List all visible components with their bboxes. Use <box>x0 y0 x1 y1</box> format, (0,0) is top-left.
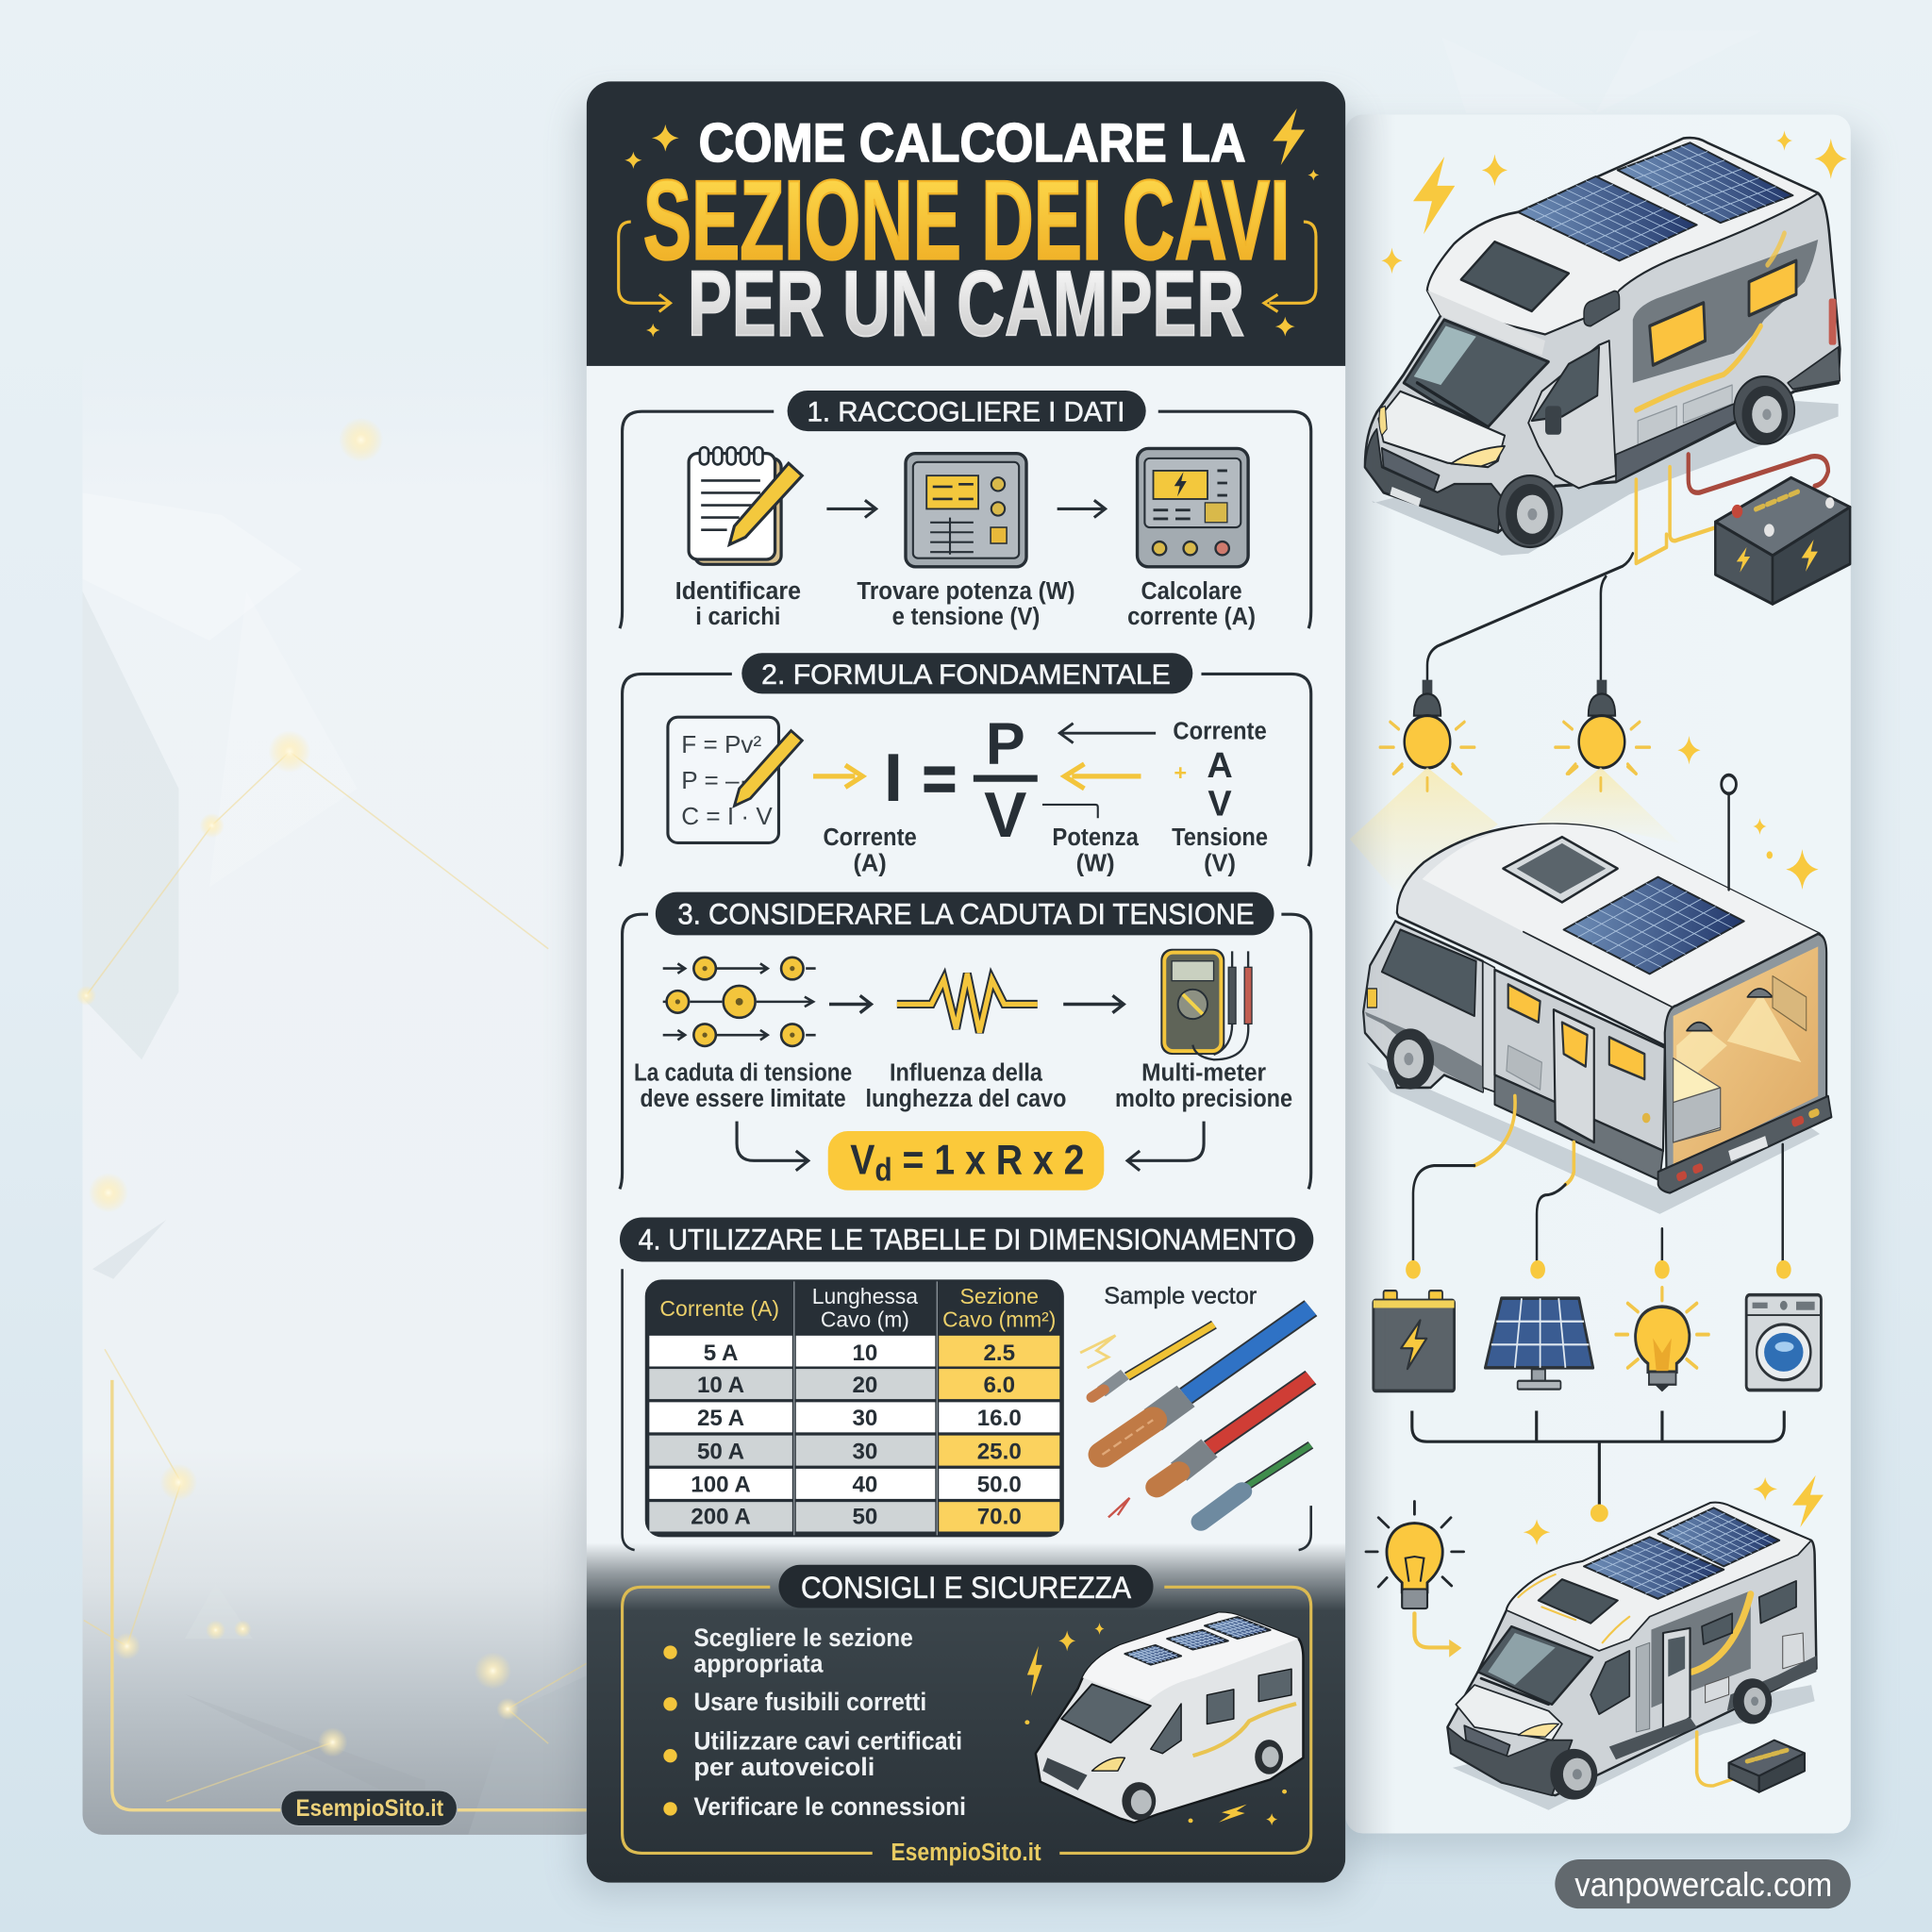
arrows and variables on the right <box>1042 724 1233 824</box>
icon: formula sheet and pencil <box>668 717 802 842</box>
arrow 1 <box>826 500 876 518</box>
captions section 2 <box>823 719 1268 876</box>
light cones below bulbs <box>1350 767 1680 893</box>
left site badge <box>281 1790 458 1826</box>
table: 200 A <box>691 1505 751 1530</box>
connector arrows to formula <box>737 1122 1204 1171</box>
panel: central infographic <box>587 81 1345 1883</box>
connector bracket between icons and bottom camper <box>1412 1411 1784 1521</box>
table: 50.0 <box>977 1473 1022 1498</box>
icon: circuit nodes <box>663 958 816 1046</box>
icon: resistor <box>897 974 1038 1033</box>
captions section 2: (W) <box>1076 850 1115 876</box>
background faint shards top right <box>1441 31 1762 113</box>
bullet list: Scegliere le sezione <box>693 1624 913 1652</box>
captions section 1: e tensione (V) <box>892 604 1040 630</box>
table: 30 <box>852 1406 877 1431</box>
table: 40 <box>852 1473 877 1498</box>
captions section 2: Potenza <box>1052 824 1140 851</box>
captions section 1: Identificare <box>675 578 801 605</box>
section 5: consigli e sicurezza <box>623 1565 1311 1866</box>
captions section 1: i carichi <box>695 604 780 630</box>
table: 2.5 <box>983 1341 1015 1366</box>
table: 10 <box>852 1341 877 1366</box>
captions section 2: Tensione <box>1172 824 1268 851</box>
yellow arrow to formula <box>813 765 862 788</box>
formula pill: d <box>874 1152 892 1188</box>
illustration: camper top view with battery <box>1365 130 1850 680</box>
table: Cavo (mm²) <box>942 1307 1056 1332</box>
title block: PER UN CAMPER <box>688 251 1244 355</box>
captions section 3: lunghezza del cavo <box>866 1086 1066 1112</box>
formula pill: V <box>850 1138 878 1184</box>
captions section 2: Corrente <box>823 824 917 851</box>
illustration: bottom camper with bulb <box>1447 1475 1824 1810</box>
icon: bulb beside bottom camper <box>1366 1501 1464 1657</box>
arrow 2 <box>1058 500 1106 518</box>
captions section 1: Calcolare <box>1141 578 1242 605</box>
table: 6.0 <box>983 1373 1015 1398</box>
bullet list: appropriata <box>693 1649 824 1677</box>
formula I = P / V: P <box>986 711 1025 777</box>
captions section 1: Trovare potenza (W) <box>857 578 1075 605</box>
captions section 3: Multi-meter <box>1141 1059 1266 1086</box>
panel: right illustration background <box>1328 114 1865 1849</box>
formula I = P / V <box>889 711 1038 851</box>
title block: SEZIONE DEI CAVI <box>643 157 1291 283</box>
icon: formula sheet and pencil: F = Pv² <box>681 730 761 758</box>
icon: formula sheet and pencil: C = I · V <box>681 802 773 830</box>
table: Sezione <box>959 1284 1039 1308</box>
section 3: caduta di tensione <box>620 892 1311 1191</box>
icon: notepad and pencil <box>689 447 802 564</box>
formula I = P / V: V <box>984 780 1026 851</box>
captions section 1: corrente (A) <box>1127 604 1256 630</box>
section 2: formula fondamentale <box>620 653 1311 876</box>
title block: COME CALCOLARE LA <box>699 113 1245 174</box>
table <box>647 1281 1062 1535</box>
icon: calculator meter <box>1138 448 1248 567</box>
table: 25.0 <box>977 1439 1022 1464</box>
section 4: tabelle di dimensionamento: 4. UTILIZZARE LE TABELLE DI DIMENSIONAMENTO <box>639 1223 1296 1256</box>
table: 20 <box>852 1373 877 1398</box>
table: 100 A <box>691 1473 751 1498</box>
bullet list: Verificare le connessioni <box>693 1792 966 1821</box>
icon: hanging bulb right <box>1556 680 1701 774</box>
site badge: vanpowercalc.com: vanpowercalc.com <box>1574 1865 1832 1904</box>
section 1: raccogliere i dati: 1. RACCOGLIERE I DATI <box>808 397 1124 428</box>
arrow 3b <box>1063 995 1124 1013</box>
captions section 3 <box>634 1059 1292 1112</box>
icon: solar panel <box>1485 1298 1593 1390</box>
section 2: formula fondamentale: 2. FORMULA FONDAMENTALE <box>761 659 1171 691</box>
captions section 1 <box>675 578 1256 630</box>
sample vector label: Sample vector <box>1104 1284 1257 1309</box>
arrows and variables on the right: A <box>1207 746 1233 786</box>
section 1: raccogliere i dati <box>620 391 1311 630</box>
table: 5 A <box>704 1341 738 1366</box>
icon: hanging bulb left <box>1380 680 1474 774</box>
site label: EsempioSito.it <box>891 1840 1041 1866</box>
illustration: white camper <box>1036 1613 1303 1823</box>
formula pill <box>828 1131 1104 1191</box>
bullet list: Utilizzare cavi certificati <box>693 1727 962 1756</box>
table: 50 <box>852 1505 877 1530</box>
sparkles around white camper <box>1024 1623 1287 1825</box>
table: 30 <box>852 1439 877 1464</box>
section 5: consigli e sicurezza: CONSIGLI E SICUREZZA <box>801 1570 1131 1605</box>
captions section 2: Corrente <box>1173 719 1267 745</box>
bullet list: per autoveicoli <box>693 1753 874 1781</box>
table: 16.0 <box>977 1406 1022 1431</box>
section 4: tabelle di dimensionamento <box>620 1217 1313 1550</box>
icon: control panel <box>906 454 1026 567</box>
icon: formula sheet and pencil: P = –· <box>681 766 747 794</box>
table: Lunghessa <box>812 1284 918 1308</box>
captions section 3: Influenza della <box>890 1059 1043 1086</box>
title block <box>619 108 1319 355</box>
captions section 2: (A) <box>853 850 887 876</box>
table: 50 A <box>697 1439 744 1464</box>
captions section 3: La caduta di tensione <box>634 1059 852 1086</box>
panel: left decorative network <box>76 345 600 1835</box>
table: 10 A <box>697 1373 744 1398</box>
arrow 3a <box>829 995 871 1013</box>
icon: washing machine <box>1746 1295 1821 1391</box>
icon: light bulb <box>1616 1288 1708 1391</box>
table: Corrente (A) <box>659 1296 779 1321</box>
bullet list <box>663 1624 966 1821</box>
formula pill: = 1 x R x 2 <box>892 1138 1084 1184</box>
captions section 2: (V) <box>1204 850 1236 876</box>
left site badge: EsempioSito.it <box>295 1796 443 1822</box>
table: 70.0 <box>977 1505 1022 1530</box>
captions section 3: molto precisione <box>1115 1086 1292 1112</box>
captions section 3: deve essere limitate <box>641 1086 846 1112</box>
shadow behind central panel <box>576 98 1356 1895</box>
table: Cavo (m) <box>821 1307 909 1332</box>
section 3: caduta di tensione: 3. CONSIDERARE LA CADUTA DI TENSIONE <box>677 898 1255 931</box>
table: 25 A <box>697 1406 744 1431</box>
icon: multimeter <box>1160 949 1252 1059</box>
illustration: camper cutaway with interior <box>1363 775 1832 1279</box>
bullet list: Usare fusibili corretti <box>693 1688 926 1716</box>
arrows and variables on the right: V <box>1208 785 1232 824</box>
arrows and variables on the right: + <box>1174 760 1187 785</box>
illustration: cables <box>1080 1308 1310 1522</box>
icon: battery <box>1374 1291 1455 1391</box>
